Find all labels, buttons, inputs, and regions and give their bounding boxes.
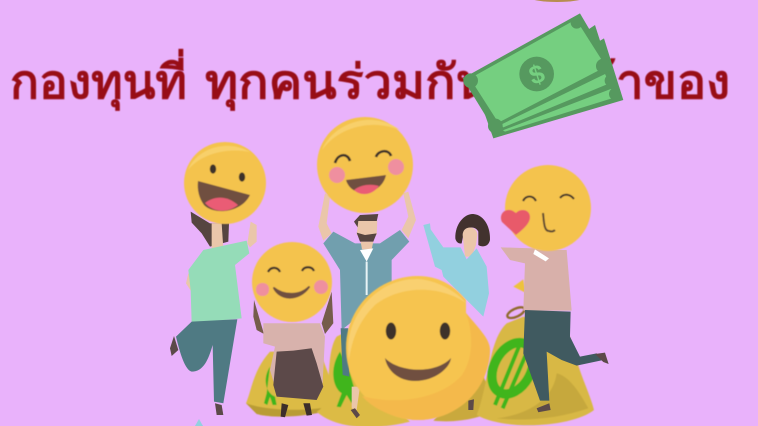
bag: right (477, 279, 594, 425)
person: seated woman (253, 292, 333, 417)
title: ทุกคนร่วมกัน (205, 55, 490, 111)
person: woman in light blue (423, 214, 490, 410)
bag: small right of centre (433, 377, 497, 421)
person: woman in green (170, 212, 257, 415)
person: man in teal (318, 192, 416, 418)
person: right person with heart (501, 247, 609, 412)
bag: middle (317, 331, 410, 426)
face: smiling emoji, seated woman (252, 242, 332, 322)
icon: heart (501, 210, 530, 235)
title (10, 48, 730, 111)
title: เป็นเจ้าของ (490, 52, 730, 108)
face: laughing emoji, top centre (317, 117, 413, 213)
face: open mouth emoji, top left (184, 142, 266, 224)
small blue fragment at bottom edge (195, 419, 203, 426)
face: large smiling emoji, centre front (346, 276, 490, 420)
icon: stack of dollar bills: $ (525, 58, 549, 91)
top edge coin fragment (529, 0, 585, 2)
money bags (246, 279, 594, 426)
icon: stack of dollar bills (463, 13, 623, 138)
bag: left (246, 352, 338, 417)
face: kissing emoji with heart (501, 165, 591, 251)
title: กองทุนที่ (10, 48, 187, 111)
